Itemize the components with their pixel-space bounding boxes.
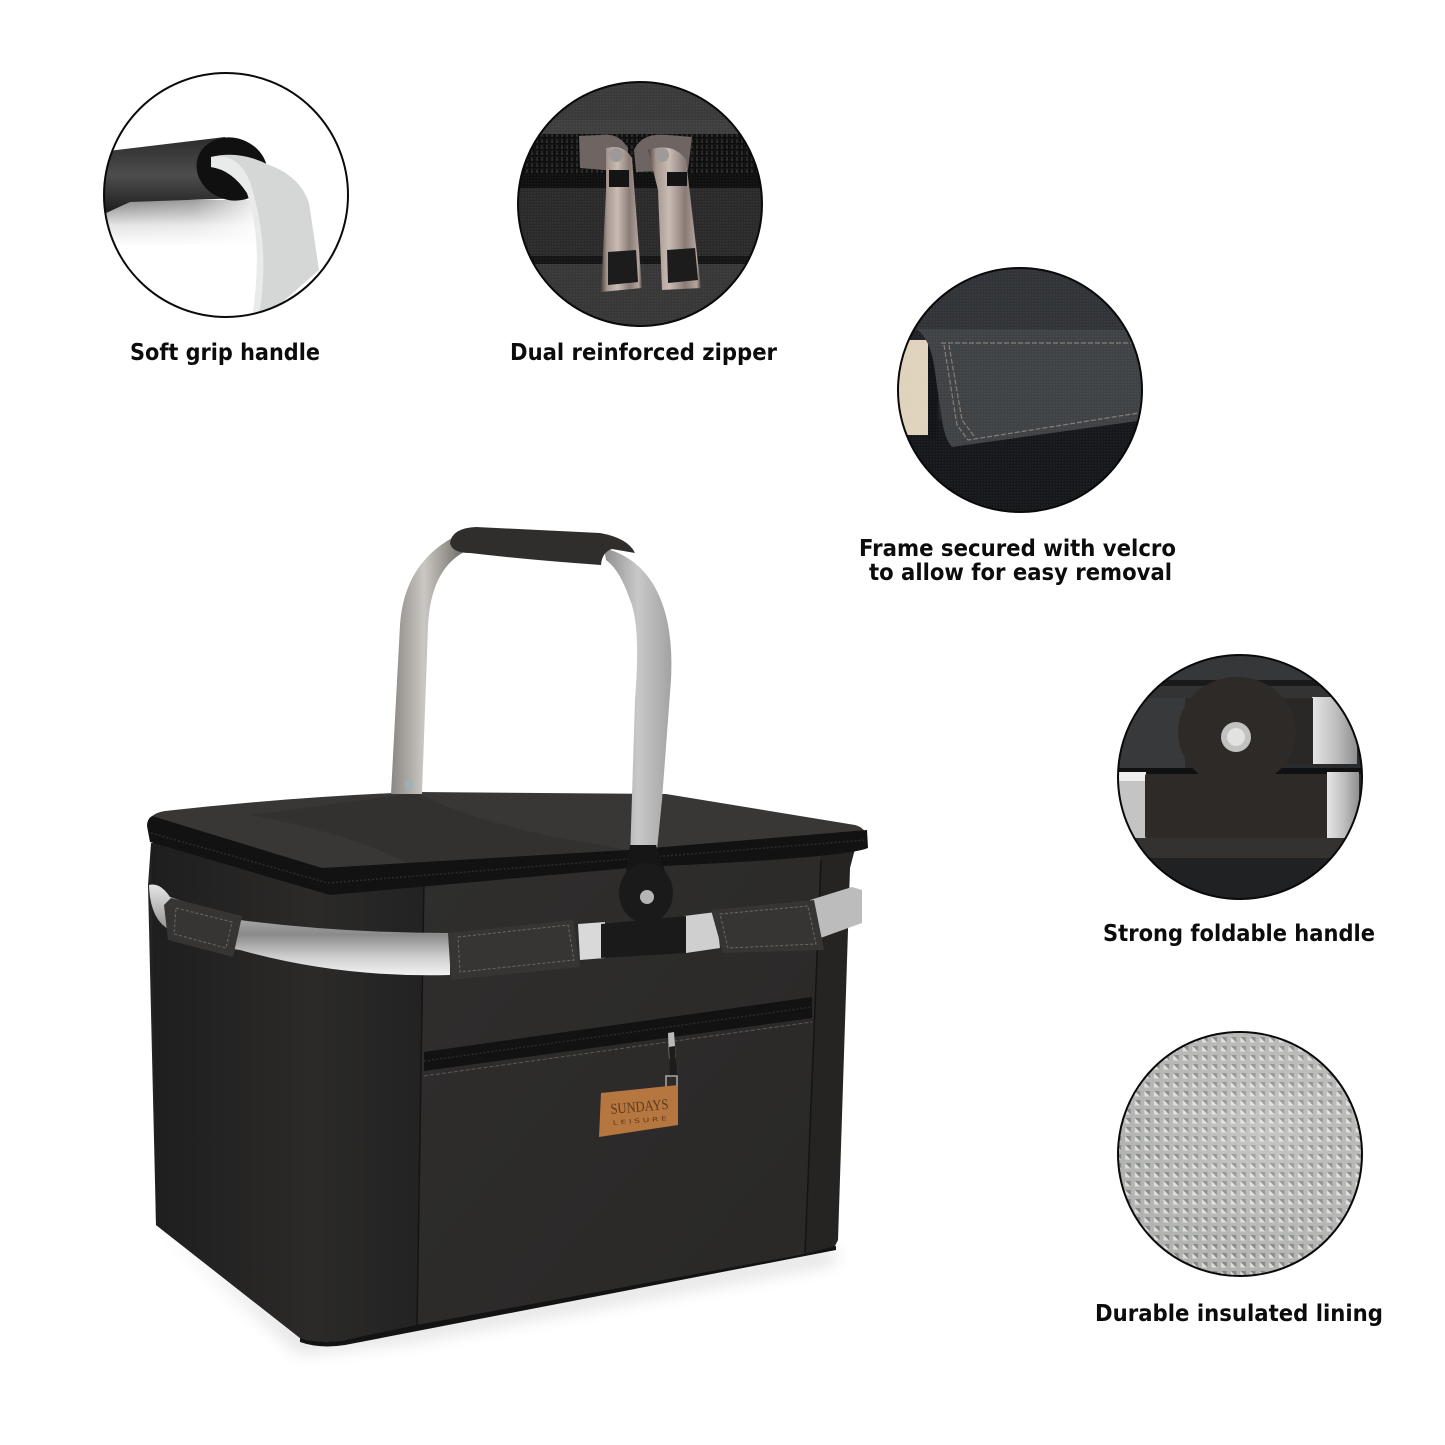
- brand patch: SUNDAYS: [610, 1097, 669, 1118]
- caption: soft grip handle: Soft grip handle: [130, 340, 320, 366]
- zipper puller: [666, 1032, 677, 1088]
- infographic canvas: [103, 72, 1382, 1356]
- lower frame bar: [1118, 772, 1359, 838]
- photo circle: soft grip handle: [100, 70, 350, 320]
- handle: [391, 527, 671, 860]
- handle soft grip: [450, 527, 635, 565]
- left zipper pull: [579, 135, 642, 292]
- panel: soft grip handle: [100, 70, 350, 366]
- ground shadow: [160, 1225, 835, 1352]
- handle left post: [391, 538, 464, 794]
- photo circle: foldable handle hinge: [1115, 652, 1365, 902]
- hinge bracket: [601, 845, 686, 958]
- velcro tab: right: [711, 900, 824, 953]
- handle right post: [604, 548, 671, 860]
- velcro tab: left: [164, 898, 242, 957]
- product: picnic basket: [147, 527, 868, 1360]
- upper handle arm: [1312, 697, 1357, 764]
- caption: durable insulated lining: Durable insulated lining: [1095, 1301, 1383, 1327]
- brand patch: L E I S U R E: [613, 1115, 667, 1127]
- caption: frame secured with velcro: to allow for easy removal: [869, 560, 1172, 586]
- basket body: [148, 830, 860, 1360]
- front pocket: [424, 997, 812, 1137]
- photo circle: velcro frame: [895, 265, 1145, 515]
- caption: frame secured with velcro: Frame secured with velcro: [859, 536, 1176, 562]
- caption: strong foldable handle: Strong foldable handle: [1103, 921, 1375, 947]
- velcro tab: centre: [448, 920, 580, 980]
- photo circle: dual reinforced zipper: [515, 80, 765, 330]
- panel: durable insulated lining: [1095, 1030, 1383, 1327]
- lid: [147, 792, 868, 895]
- caption: dual reinforced zipper: Dual reinforced zipper: [510, 340, 778, 366]
- photo circle: insulated lining texture: [1115, 1030, 1365, 1280]
- panel: frame secured with velcro: [859, 265, 1184, 586]
- brand patch: [599, 1085, 678, 1137]
- metal frame: [149, 884, 862, 975]
- right zipper pull: [634, 135, 701, 290]
- panel: strong foldable handle: [1103, 652, 1375, 947]
- panel: dual reinforced zipper: [510, 80, 778, 366]
- hinge disc and rivet: [1178, 677, 1283, 774]
